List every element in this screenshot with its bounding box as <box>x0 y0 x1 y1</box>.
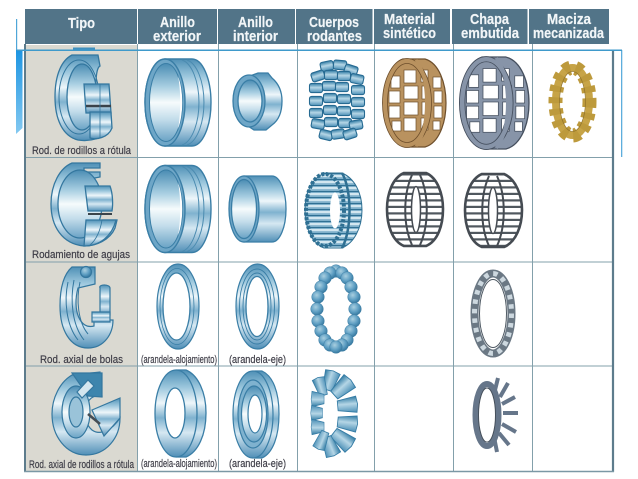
icon: barrel rollers <box>310 60 364 141</box>
blue slide accent left <box>16 19 22 134</box>
icon: axial ball cage <box>474 274 512 354</box>
icon: spherical roller bearing <box>55 55 112 141</box>
header row: interior <box>233 28 278 45</box>
label: arandela-eje: (arandela-eje) <box>229 354 286 366</box>
icon: stamped steel cage <box>459 57 529 150</box>
header: Tipo: Tipo <box>68 15 95 32</box>
icon: stamped needle cage <box>465 174 522 247</box>
tipo column background <box>26 45 137 471</box>
label: Rod. axial de rodillos a rótula: Rod. axial de rodillos a rótula <box>29 459 135 471</box>
row 3: rodamiento axial de bolas <box>40 264 512 366</box>
header row: sintético <box>383 25 436 42</box>
icon: needle rollers <box>305 173 362 248</box>
header: Chapa embutida: Chapa <box>470 11 510 28</box>
label: arandela-alojamiento: (arandela-alojamiento) <box>141 458 217 470</box>
icon: ball set <box>311 265 361 353</box>
icon: shaft washer thick <box>233 371 279 458</box>
label: arandela-alojamiento: (arandela-alojamiento) <box>141 354 217 366</box>
row 1: rodamiento de rodillos a rótula <box>32 55 590 157</box>
icon: synthetic cage <box>382 58 446 148</box>
icon: shaft washer <box>236 264 279 349</box>
header: Anillo exterior: Anillo <box>160 14 195 31</box>
icon: stamped finger cage <box>476 378 518 452</box>
label: Rod. axial de bolas: Rod. axial de bolas <box>40 354 123 366</box>
header row <box>25 9 609 45</box>
icon: tapered rollers <box>311 369 358 459</box>
icon: inner ring <box>233 73 282 130</box>
icon: inner ring <box>229 176 286 242</box>
icon: needle bearing <box>51 163 117 246</box>
icon: housing washer thick <box>155 370 206 457</box>
row 2: rodamiento de agujas <box>32 163 522 261</box>
icon: outer ring <box>145 59 211 146</box>
row 4: rodamiento axial de rodillos a rótula <box>29 369 518 471</box>
icon: synthetic needle cage <box>387 173 443 246</box>
header: Maciza mecanizada: Maciza <box>547 11 592 28</box>
header row: exterior <box>153 28 201 45</box>
blue slide accent right <box>621 50 622 157</box>
label: Rod. de rodillos a rótula: Rod. de rodillos a rótula <box>32 145 132 157</box>
header row: rodantes <box>307 28 362 45</box>
header row: mecanizada <box>533 25 605 42</box>
header: Cuerpos rodantes: Cuerpos <box>309 14 359 31</box>
label: Rodamiento de agujas: Rodamiento de agujas <box>32 249 130 261</box>
icon: housing washer <box>157 264 199 349</box>
icon: axial spherical roller bearing <box>52 372 120 455</box>
icon: axial ball bearing <box>60 266 113 348</box>
icon: outer ring <box>145 166 211 252</box>
header row: embutida <box>461 25 520 42</box>
label: arandela-eje: (arandela-eje) <box>229 458 286 470</box>
icon: machined gold cage <box>556 68 590 136</box>
header: Anillo interior: Anillo <box>238 14 273 31</box>
blue slide rule <box>17 50 622 51</box>
header: Material sintético: Material <box>384 11 435 28</box>
